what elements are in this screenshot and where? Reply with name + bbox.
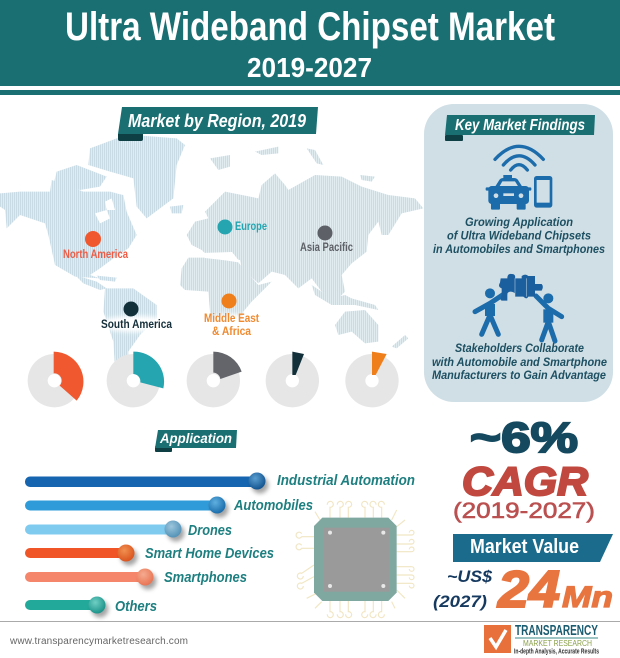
currency label [433,567,493,611]
market value number: Mn [562,581,613,614]
logo: transparency market research: MARKET RESEARCH [523,638,592,648]
icon: chip [296,501,414,618]
text: stakeholders collaborate: Stakeholders Collaborate [455,341,584,355]
region heading banner [118,107,318,141]
application heading banner: Application [159,430,232,446]
text: stakeholders collaborate [432,341,607,382]
marker: Europe: Europe [235,221,267,233]
footer rule [0,621,620,622]
bar: smartphones [25,568,247,590]
dotted world map [0,135,423,368]
bar: others [25,596,157,618]
marker: Middle East and Africa: & Africa [212,326,252,338]
bar: automobiles: Automobiles [233,497,313,514]
text: growing application: of Ultra Wideband Chipsets [447,228,591,242]
currency label: ~US$ [447,567,493,586]
bar: automobiles [25,496,313,518]
text: growing application [433,215,605,256]
text: stakeholders collaborate: with Automobile and Smartphone [432,355,607,369]
icon: wifi car and smartphone [486,146,552,210]
marker: Asia Pacific [300,226,353,254]
region heading banner: Market by Region, 2019 [128,111,306,131]
marker: Middle East and Africa: Middle East [204,313,259,325]
marker: North America: North America [63,249,128,261]
marker: Asia Pacific: Asia Pacific [300,242,353,254]
logo: transparency market research [484,623,599,656]
currency label: (2027) [433,592,487,611]
application heading banner [155,430,237,452]
marker: South America [98,302,174,332]
market value number [497,561,613,619]
market value banner [453,534,613,562]
bar: smart home devices: Smart Home Devices [145,545,274,562]
bar: industrial automation: Industrial Automation [277,472,415,489]
market value banner: Market Value [470,536,579,558]
bar: industrial automation [25,472,415,494]
text: growing application: in Automobiles and Smartphones [433,242,605,256]
region markers and labels [63,220,353,340]
CAGR label: CAGR [462,460,588,504]
findings heading banner: Key Market Findings [455,117,585,134]
marker: North America [63,231,128,261]
bar: others: Others [115,598,157,615]
CAGR value: ~6% [470,414,578,462]
market value number: 24 [497,561,560,619]
region pie charts [28,352,399,407]
application bar chart [25,472,415,618]
marker: Middle East and Africa [200,294,264,340]
subtitle years: 2019-2027 [247,52,372,83]
bar: drones [25,520,232,542]
pie: North America [28,352,83,407]
text: growing application: Growing Application [465,215,573,229]
panel: key market findings [424,104,613,402]
header band [0,0,620,95]
pie: Middle East and Africa [345,352,399,407]
text: stakeholders collaborate: Manufacturers to Gain Advantage [432,368,606,382]
bar: drones: Drones [188,522,232,539]
CAGR period: (2019-2027) [453,498,595,523]
marker: South America: South America [101,319,173,331]
pie: Europe [107,352,164,407]
market value callout [433,534,613,619]
bar: smartphones: Smartphones [164,569,247,586]
findings heading banner [445,115,595,141]
CAGR callout [453,414,595,523]
pie: South America [266,352,319,407]
marker: Europe [218,220,267,234]
icon: people holding puzzle pieces [475,274,562,341]
logo mark [484,625,511,653]
footer website: www.transparencymarketresearch.com [9,636,188,647]
pie: Asia Pacific [187,352,242,407]
bar: smart home devices [25,544,274,566]
